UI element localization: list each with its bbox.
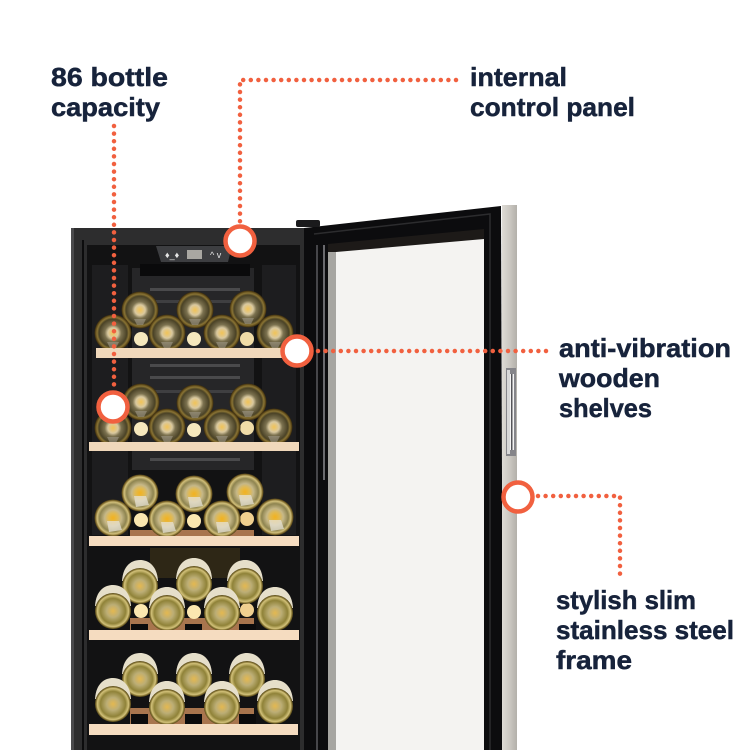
shelf 5 bottles <box>95 653 293 725</box>
leader: 86 bottle capacity <box>112 126 116 392</box>
door frame <box>304 206 503 750</box>
label: stylish slim stainless steel frame: stylish slim <box>556 585 696 615</box>
label: stylish slim stainless steel frame: stainless steel <box>556 615 734 645</box>
shelf 4 bottles <box>95 558 293 631</box>
marker: frame <box>504 482 532 512</box>
cabinet body <box>71 228 307 750</box>
wine cooler <box>71 205 517 750</box>
control panel display <box>156 246 232 262</box>
door glass <box>336 239 484 750</box>
cabinet interior <box>87 245 300 750</box>
shelf 1 bottles <box>94 290 294 352</box>
shelf 3 bottles <box>94 474 294 538</box>
leader: anti-vibration shelves <box>318 349 550 353</box>
label: stylish slim stainless steel frame <box>556 585 734 675</box>
label: anti-vibration wooden shelves <box>558 333 731 423</box>
door gasket strip <box>328 252 336 750</box>
shelf 5 <box>89 724 298 735</box>
marker: control panel <box>226 226 254 256</box>
door handle <box>506 368 516 456</box>
leader: stainless steel frame <box>538 496 620 576</box>
control panel display: ♦_♦ <box>165 250 180 260</box>
control panel display: ^ v <box>210 250 222 260</box>
label: anti-vibration wooden shelves: shelves <box>559 393 652 423</box>
shelf 2 bottles <box>94 384 292 446</box>
shelf 4 <box>89 630 299 640</box>
shelf 3 <box>89 536 299 546</box>
marker: shelves <box>282 336 312 366</box>
label: stylish slim stainless steel frame: frame <box>556 645 632 675</box>
hinge <box>296 220 320 227</box>
shelf 1 <box>96 348 286 358</box>
label: anti-vibration wooden shelves: wooden <box>558 363 660 393</box>
label: 86 bottle capacity <box>51 62 168 122</box>
label: anti-vibration wooden shelves: anti-vibration <box>559 333 731 363</box>
stainless steel frame <box>502 205 517 750</box>
label: internal control panel <box>470 62 635 122</box>
shelf 2 <box>89 442 299 451</box>
label: internal control panel: control panel <box>470 92 635 122</box>
label: internal control panel: internal <box>470 62 567 92</box>
leader: internal control panel <box>240 80 456 226</box>
label: 86 bottle capacity: 86 bottle <box>51 62 168 92</box>
label: 86 bottle capacity: capacity <box>51 92 161 122</box>
marker: capacity <box>98 392 128 422</box>
